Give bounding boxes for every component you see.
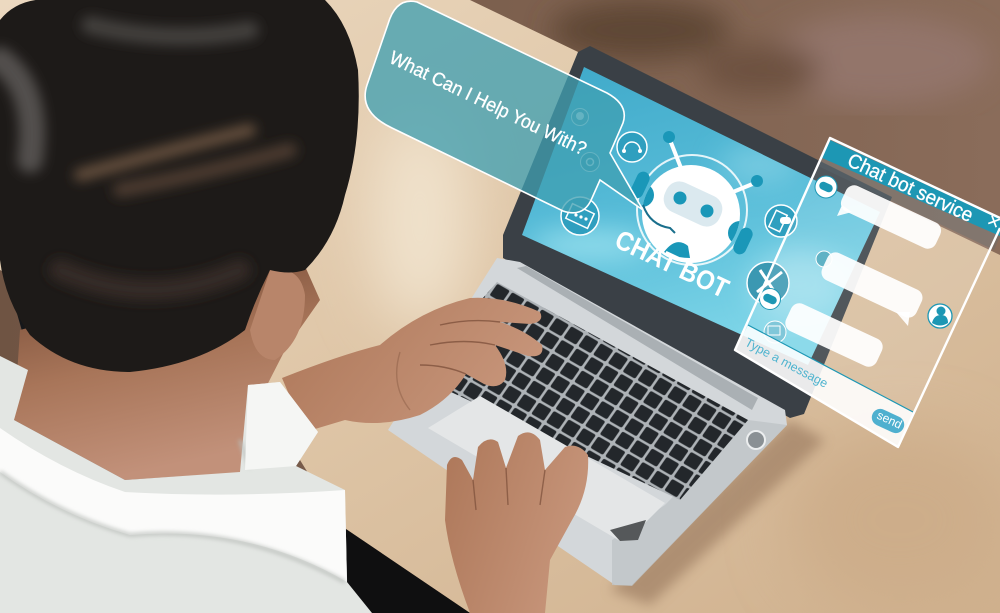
dark clothing below desk: [340, 525, 470, 613]
icon: gears: [580, 152, 600, 172]
touchpad corner: [610, 520, 646, 541]
robot ears: [628, 170, 755, 256]
user avatar: [928, 304, 952, 328]
icon: tools: [747, 262, 789, 304]
input divider: [748, 325, 913, 412]
panel border: [735, 138, 1000, 447]
screen icons: [561, 108, 832, 343]
finger creases: [473, 468, 545, 510]
robot visor: [659, 177, 727, 231]
chat window panel: [735, 138, 1000, 447]
hair highlights: [0, 25, 290, 290]
robot antenna left: [663, 131, 681, 168]
hand on keyboard: [282, 298, 542, 432]
shirt collar: [0, 428, 347, 582]
robot cheek accents: [642, 186, 740, 242]
bubble: user message: [819, 249, 925, 326]
robot head: [642, 165, 740, 263]
icon: headphones: [617, 132, 647, 162]
keyboard: [415, 282, 748, 500]
bot avatar top: [815, 176, 837, 198]
man: [0, 0, 372, 613]
bot avatar bottom: [760, 288, 780, 310]
send button: send: [875, 408, 904, 432]
speech bubble: What Can I Help You With?: [365, 1, 643, 213]
laptop base: [388, 258, 787, 585]
header title: Chat bot service: [844, 150, 976, 227]
laptop shadow on desk: [610, 420, 825, 605]
input placeholder: Type a message: [743, 335, 830, 391]
icon: small circle: [816, 251, 832, 267]
ear: [250, 269, 305, 360]
robot halo ring: [637, 155, 747, 265]
bubble text: What Can I Help You With?: [386, 48, 590, 160]
desk glow: [370, 110, 1000, 610]
header band: [822, 140, 1000, 236]
robot eyes: [674, 192, 714, 218]
robot mic arm: [643, 205, 675, 233]
power button: [747, 431, 765, 449]
input area: [735, 325, 913, 447]
background: floor texture: [550, 0, 990, 105]
base front shading: [612, 420, 787, 586]
hand on touchpad and forearm: [445, 432, 588, 613]
hand creases: [397, 321, 500, 410]
bubble: first bot message: [837, 182, 944, 252]
touchpad: [428, 396, 665, 541]
laptop lid and bezel: [503, 46, 892, 418]
shirt body: [0, 356, 372, 613]
sleeve highlight: [245, 382, 318, 470]
robot antenna right: [728, 175, 763, 194]
send button: [869, 406, 907, 436]
icon: brain: [572, 108, 588, 126]
bubble shape: [365, 1, 643, 213]
laptop screen: [522, 67, 880, 365]
hair: [0, 0, 359, 372]
hinge bar: [517, 266, 758, 410]
robot graphic: [628, 131, 763, 265]
icon: phone chat: [765, 205, 797, 237]
panel glass: [735, 138, 1000, 447]
laptop: [388, 46, 892, 586]
screen glow: [530, 145, 850, 320]
chair back: [8, 280, 48, 366]
icon: chat: [561, 197, 599, 235]
header shadow: [818, 158, 1000, 250]
neck: [14, 255, 320, 480]
robot collar: [664, 242, 690, 258]
shirt fold shading: [0, 440, 345, 582]
icon: mail: [764, 321, 786, 343]
screen title: CHAT BOT: [610, 224, 734, 304]
bubble: second bot message: [782, 300, 886, 370]
